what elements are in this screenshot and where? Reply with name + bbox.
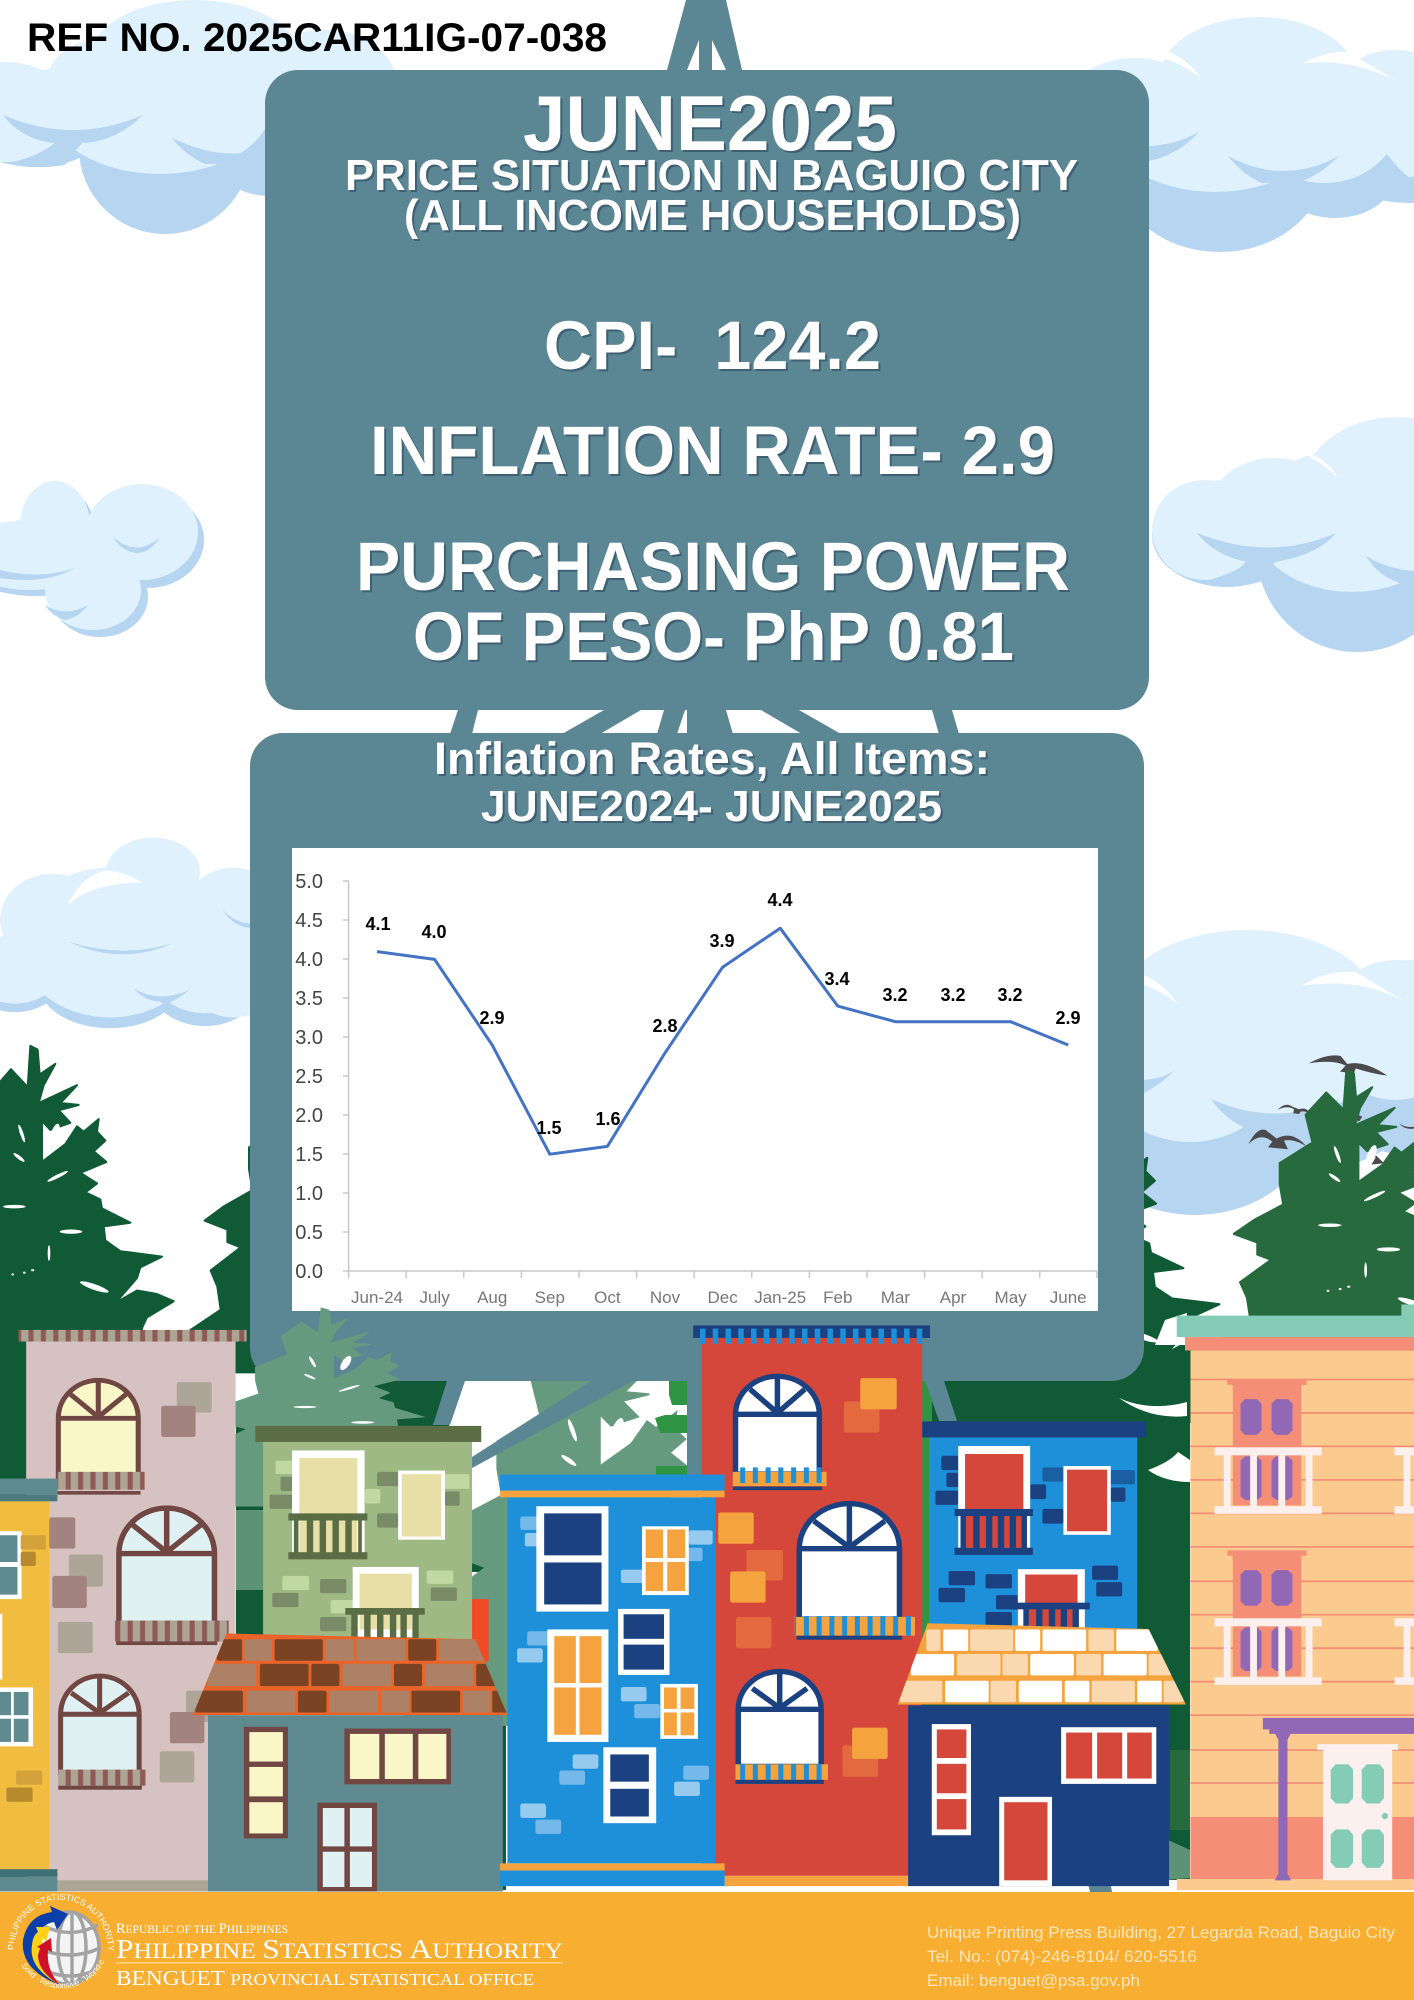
data labels: 3.2 [882, 985, 908, 1005]
green building windows [288, 1450, 445, 1638]
y axis labels: 3.5 [295, 988, 323, 1010]
footer: agency name: REPUBLIC OF THE PHILIPPINES [116, 1921, 288, 1937]
navy house [908, 1705, 1169, 1886]
data labels: 2.9 [479, 1008, 505, 1028]
data labels: 4.1 [365, 914, 391, 934]
y axis labels: 1.0 [295, 1183, 323, 1205]
y axis labels: 2.0 [295, 1105, 323, 1127]
data labels [365, 890, 1081, 1138]
pink building [18, 1330, 247, 1891]
tree: pale overlapping chart panel [186, 1308, 468, 1506]
arched window A [736, 1376, 819, 1474]
tree: behind chart panel left [181, 1051, 457, 1372]
cloud: top left [0, 0, 397, 234]
heading: date and title: PRICE SITUATION IN BAGUIO CITY [345, 151, 1078, 200]
red building orange brick [718, 1512, 754, 1544]
front door [1317, 1744, 1398, 1880]
x axis labels: Aug [477, 1288, 507, 1307]
y axis labels: 1.5 [295, 1144, 323, 1166]
y axis labels: 2.5 [295, 1066, 323, 1088]
panel: inflation chart [250, 733, 1144, 1381]
footer: contact details [927, 1923, 1395, 1990]
heading: date and title: JUNE2025 [523, 79, 897, 167]
footer: agency name: BENGUET PROVINCIAL STATISTICAL OFFICE [116, 1966, 534, 1990]
x axis labels [351, 1288, 1087, 1307]
arched window 2 [119, 1508, 214, 1624]
data labels: 3.4 [824, 969, 850, 989]
data line [377, 928, 1068, 1154]
x axis labels: Mar [881, 1288, 910, 1307]
tree: right of chart panel [918, 1080, 1233, 1422]
blue house upper [922, 1421, 1146, 1630]
x axis labels: Apr [940, 1288, 967, 1307]
x axis labels: Jan-25 [754, 1288, 806, 1307]
data labels: 2.9 [1055, 1008, 1081, 1028]
teal house [208, 1715, 503, 1891]
awning and column [1263, 1718, 1414, 1880]
y axis labels: 0.0 [295, 1261, 323, 1283]
text block: indicators: OF PESO- PhP 0.81 [413, 598, 1014, 675]
peach building [1177, 1304, 1414, 1890]
y axis labels: 3.0 [295, 1027, 323, 1049]
ground trees behind the houses [0, 1300, 1190, 1890]
arched window 3 [61, 1676, 139, 1772]
tree: pale centre [405, 1320, 778, 1725]
x axis labels: Sep [535, 1288, 565, 1307]
y axis labels [295, 871, 323, 1283]
tree: left tall [0, 1046, 174, 1367]
x axis labels: May [995, 1288, 1027, 1307]
x axis labels: Dec [707, 1288, 738, 1307]
footer: contact details: Email: benguet@psa.gov.ph [927, 1971, 1140, 1990]
line chart [292, 848, 1098, 1311]
bright green foliage [655, 1381, 687, 1476]
footer: agency name: PHILIPPINE STATISTICS AUTHORITY [116, 1934, 563, 1964]
blue building windows [536, 1506, 698, 1823]
y axis labels: 0.5 [295, 1222, 323, 1244]
cloud: top right [1060, 17, 1414, 252]
x axis labels: Oct [594, 1288, 621, 1307]
footer: agency name [116, 1921, 563, 1990]
y axis labels: 4.5 [295, 910, 323, 932]
x axis labels: June [1050, 1288, 1087, 1307]
x axis labels: July [419, 1288, 450, 1307]
cloud: middle right [1152, 417, 1414, 652]
data labels: 3.9 [709, 931, 735, 951]
red building [693, 1325, 930, 1886]
cloud: upper left small [0, 481, 204, 637]
cream tile roof [898, 1623, 1186, 1704]
chart heading: JUNE2024- JUNE2025 [481, 782, 942, 831]
chart heading [434, 733, 990, 831]
heading: date and title: (ALL INCOME HOUSEHOLDS) [404, 191, 1021, 240]
logo: Philippine Statistics Authority seal: Solid · Responsive · World-class [22, 1960, 104, 1990]
green building [255, 1426, 489, 1662]
brick roof [193, 1633, 507, 1715]
text block: indicators: CPI- 124.2 [544, 307, 881, 384]
tree: right tall [1209, 1070, 1414, 1380]
text block: indicators [356, 307, 1070, 675]
arched window B [799, 1504, 899, 1619]
y axis labels: 5.0 [295, 871, 323, 893]
data labels: 4.4 [767, 890, 793, 910]
houses: left half [0, 1330, 507, 1891]
logo: Philippine Statistics Authority seal: PHILIPPINE STATISTICS AUTHORITY [8, 1894, 114, 1951]
data labels: 3.2 [940, 985, 966, 1005]
panel: key indicators [265, 70, 1149, 710]
sign posts [433, 0, 1112, 1892]
blue building [500, 1475, 725, 1886]
cloud: lower left [0, 837, 295, 1028]
footer band [0, 1892, 1414, 2000]
data labels: 3.2 [997, 985, 1023, 1005]
cloud: lower right [1077, 930, 1414, 1215]
yellow building [0, 1479, 57, 1891]
heading: date and title [345, 79, 1078, 240]
houses: right half [693, 1304, 1414, 1890]
footer: contact details: Tel. No.: (074)-246-8104/ 620-5516 [927, 1947, 1197, 1966]
data labels: 4.0 [421, 922, 447, 942]
data labels: 1.5 [536, 1118, 562, 1138]
chart heading: Inflation Rates, All Items: [434, 733, 990, 784]
text block: indicators: PURCHASING POWER [356, 528, 1070, 605]
arched window 1 [58, 1380, 138, 1476]
x axis labels: Jun-24 [351, 1288, 403, 1307]
data labels: 2.8 [652, 1016, 678, 1036]
x axis labels: Feb [823, 1288, 852, 1307]
arched window C [738, 1671, 821, 1766]
footer: contact details: Unique Printing Press Building, 27 Legarda Road, Baguio City [927, 1923, 1395, 1942]
blue building bricks [517, 1517, 713, 1834]
data labels: 1.6 [595, 1109, 621, 1129]
birds [1248, 1055, 1414, 1165]
y axis labels: 4.0 [295, 949, 323, 971]
x axis labels: Nov [650, 1288, 681, 1307]
text block: indicators: INFLATION RATE- 2.9 [370, 412, 1055, 489]
reference number: REF NO. 2025CAR11IG-07-038 [27, 16, 607, 60]
logo: Philippine Statistics Authority seal [8, 1894, 114, 1990]
